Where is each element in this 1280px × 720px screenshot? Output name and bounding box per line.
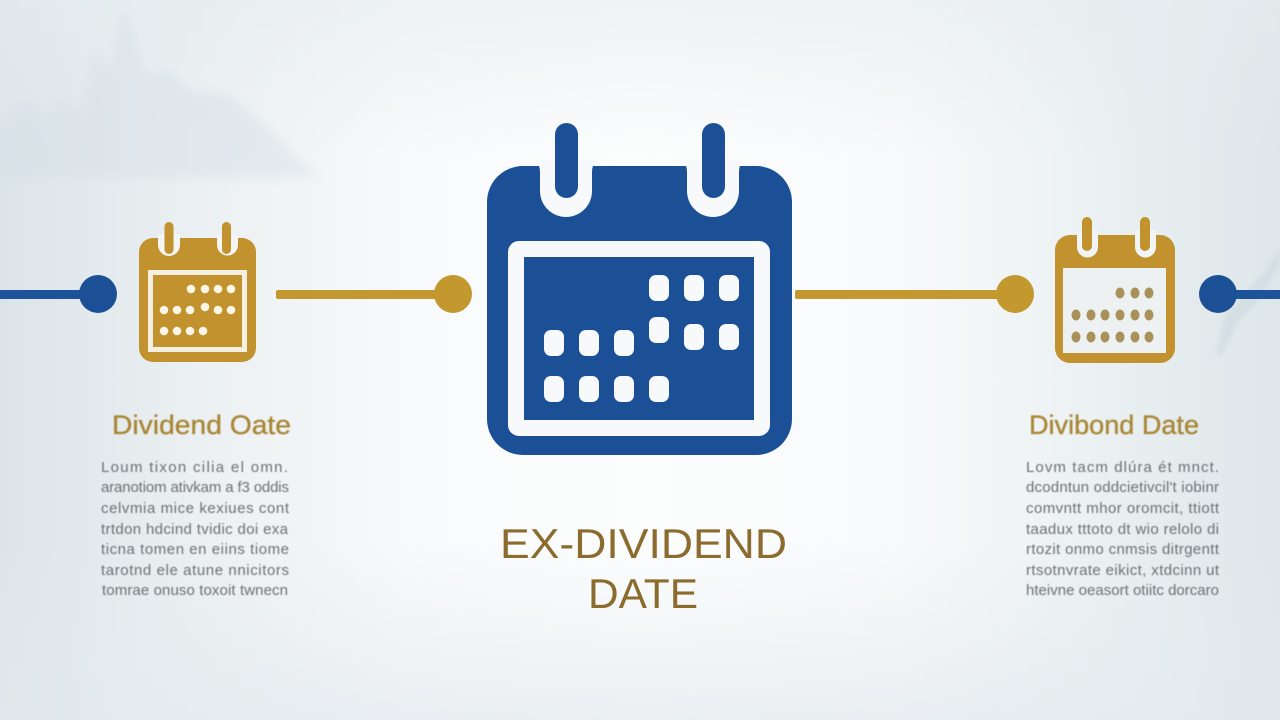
icon: right calendar: [1055, 217, 1175, 363]
right text block: [1026, 459, 1220, 599]
icon: left calendar: [139, 222, 256, 362]
right text block: dcodntun oddcietivcil't iobinr: [1026, 479, 1219, 496]
left text block: ticna tomen en eiins tiome: [101, 541, 289, 558]
left text block: Loum tixon cilia el omn.: [101, 459, 288, 476]
left blue connector: [0, 275, 117, 313]
left gold connector: [276, 275, 472, 313]
right text block: comvntt mhor oromcit, ttiott: [1026, 500, 1220, 517]
right blue connector: [1199, 275, 1280, 313]
title: EX-DIVIDEND: [500, 520, 787, 567]
left heading: Dividend Oate: [112, 410, 291, 440]
right text block: rtsotnvrate eikict, xtdcinn ut: [1026, 562, 1220, 579]
left text block: trtdon hdcind tvidic doi exa: [101, 521, 289, 538]
left text block: aranotiom ativkam a f3 oddis: [101, 479, 289, 496]
left text block: celvmia mice kexiues cont: [101, 500, 290, 517]
right heading: Divibond Date: [1029, 410, 1199, 440]
right text block: taadux tttoto dt wio relolo di: [1026, 521, 1219, 538]
title: [500, 520, 787, 617]
title: DATE: [588, 570, 698, 617]
left text block: tomrae onuso toxoit twnecn: [102, 582, 288, 599]
right text block: Lovm tacm dlúra ét mnct.: [1026, 459, 1219, 476]
right text block: rtozit onmo cnmsis ditrgentt: [1026, 541, 1220, 558]
icon: main calendar: [487, 123, 792, 455]
left text block: [101, 459, 290, 599]
right text block: hteivne oeasort otiitc dorcaro: [1026, 582, 1219, 599]
faint background chart: right: [1215, 250, 1280, 355]
right gold connector: [795, 275, 1034, 313]
faint background chart: top left: [0, 5, 320, 178]
left text block: tarotnd ele atune nnicitors: [101, 562, 289, 579]
